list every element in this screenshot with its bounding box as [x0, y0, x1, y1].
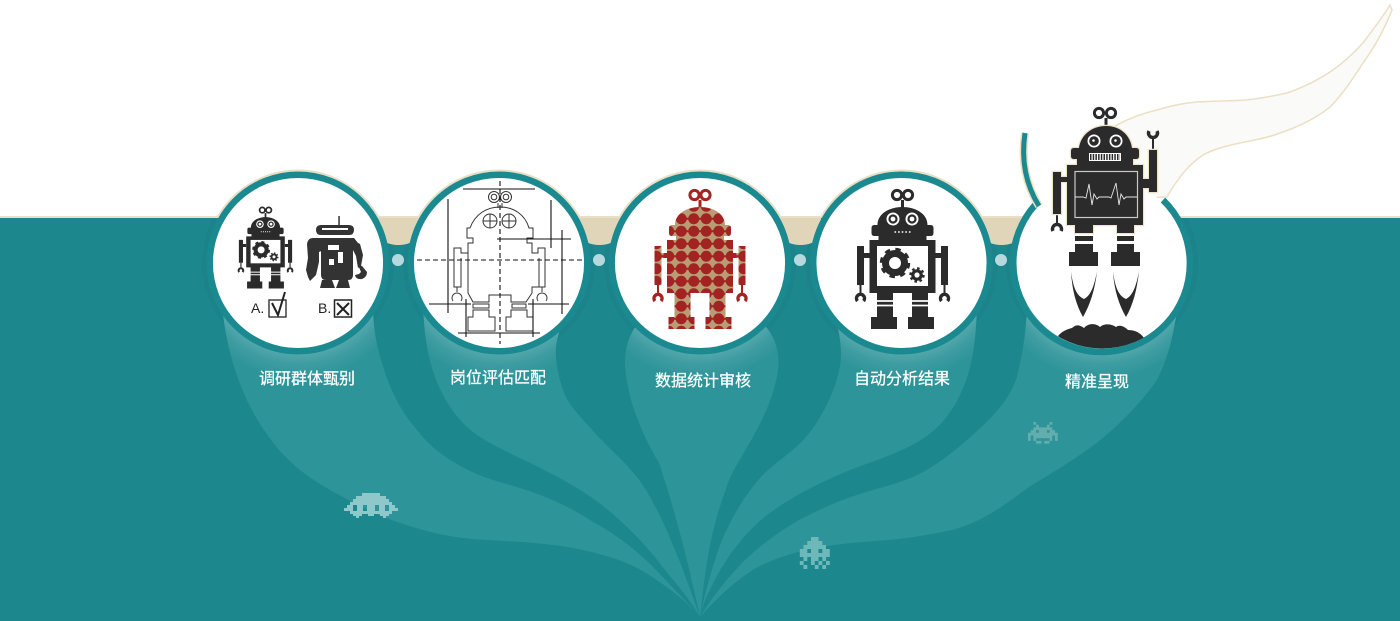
ribbons converging from circles to bottom point: [222, 305, 1178, 617]
open ring: [1013, 200, 1190, 352]
circle 5: rocket robot: [1013, 108, 1190, 352]
circle 2: blueprint robot: [411, 175, 587, 351]
pixel alien: squid: [800, 537, 830, 569]
label: step 3: 数据统计审核: [655, 372, 751, 390]
circle 1: survey group screening: [210, 175, 386, 351]
option A label: A.: [251, 300, 264, 316]
circle 4: analysis robot with gears: [813, 175, 990, 351]
label: step 2: 岗位评估匹配: [450, 369, 546, 387]
checked box: [269, 292, 286, 317]
dimension lines: [417, 181, 582, 344]
rocket flames: [1071, 271, 1139, 317]
heartbeat monitor: [1075, 172, 1138, 218]
teal lower panel: [0, 218, 1400, 621]
robot B: [306, 216, 367, 288]
pixel alien: saucer: [344, 493, 398, 518]
red robot: [654, 190, 746, 329]
glow beneath circles: [223, 305, 1176, 372]
smoke trail behind the rocket robot: [1100, 5, 1392, 200]
label: step 1: 调研群体甄别: [259, 370, 355, 388]
circle 3: patterned red robot: [612, 175, 788, 351]
robot A: [239, 207, 292, 288]
label: step 4: 自动分析结果: [854, 370, 950, 388]
connector dots: [392, 254, 1007, 266]
flying robot: [1052, 108, 1158, 266]
pixel alien: crab: [1028, 422, 1058, 444]
ground smoke: [1058, 324, 1144, 348]
option B label: B.: [318, 300, 331, 316]
gear robot: [856, 190, 948, 329]
label: step 5: 精准呈现: [1065, 373, 1129, 391]
cream gaps between circles: [378, 218, 1028, 245]
blueprint outline: [452, 192, 547, 331]
crossed box: [334, 300, 352, 317]
swoosh arc: [1024, 133, 1039, 206]
